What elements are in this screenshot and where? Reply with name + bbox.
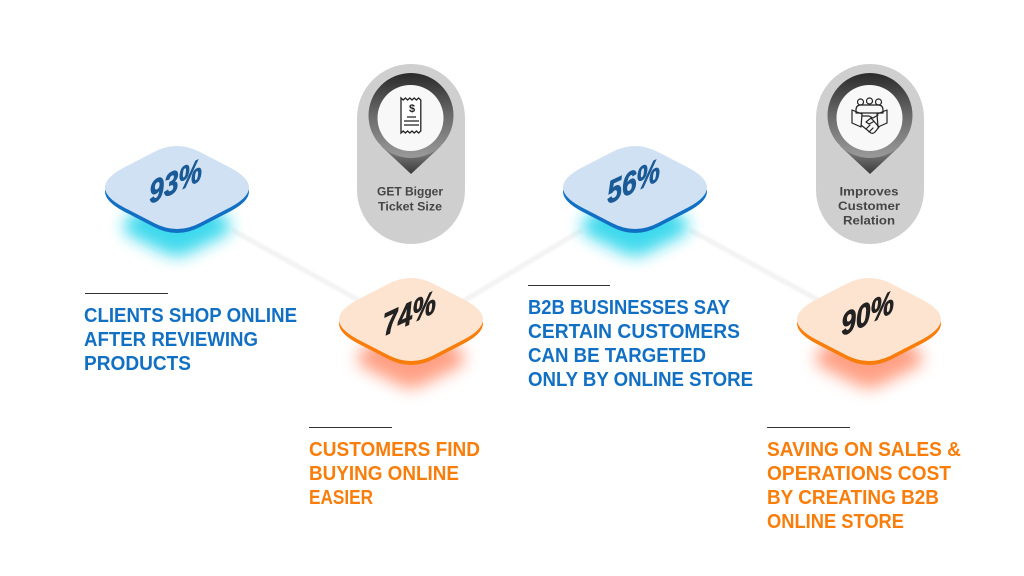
text block: saving on sales: OPERATIONS COST [767, 463, 951, 485]
text block: b2b businesses: CERTAIN CUSTOMERS [528, 321, 740, 343]
stat diamond: 93% [105, 146, 249, 256]
stat diamond: 90% [797, 278, 941, 388]
connector lines [232, 230, 818, 302]
stat diamond: 56% [563, 146, 707, 256]
text block: clients shop online [84, 293, 297, 375]
stat diamond: 93%: 93% [148, 153, 203, 212]
text block: customers find buying easier [309, 427, 480, 509]
text block: customers find buying easier: CUSTOMERS FIND [309, 439, 480, 461]
text block: customers find buying easier: BUYING ONLINE [309, 463, 459, 485]
text block: clients shop online: CLIENTS SHOP ONLINE [84, 305, 297, 327]
pill label: Improves [840, 184, 899, 198]
pin marker [368, 73, 454, 174]
stat diamond: 90%: 90% [840, 285, 895, 344]
text block: customers find buying easier: EASIER [309, 487, 373, 509]
icon: handshake with people [836, 85, 902, 151]
text block: b2b businesses: CAN BE TARGETED [528, 345, 706, 367]
text block: saving on sales: BY CREATING B2B [767, 487, 939, 509]
pin marker [828, 73, 912, 174]
pill label [377, 184, 443, 214]
pill label: Customer [838, 199, 900, 213]
text block: b2b businesses [528, 285, 753, 391]
text block: clients shop online: PRODUCTS [84, 353, 191, 375]
pill: improves customer relation [816, 64, 924, 244]
icon: receipt [378, 85, 444, 151]
text block: saving on sales [767, 427, 961, 533]
text block: b2b businesses: B2B BUSINESSES SAY [528, 297, 731, 319]
text block: clients shop online: AFTER REVIEWING [84, 329, 258, 351]
pill label [838, 184, 900, 228]
pill: get bigger ticket size [357, 64, 465, 244]
pill label: GET Bigger [377, 184, 443, 198]
pill label: Ticket Size [378, 200, 442, 214]
text block: saving on sales: SAVING ON SALES & [767, 439, 961, 461]
stat diamond: 74%: 74% [382, 285, 437, 344]
icon: receipt: $ [409, 103, 415, 115]
stat diamond: 56%: 56% [606, 153, 661, 212]
stat diamond: 74% [339, 278, 483, 388]
pill label: Relation [843, 214, 895, 228]
text block: b2b businesses: ONLY BY ONLINE STORE [528, 369, 753, 391]
text block: saving on sales: ONLINE STORE [767, 511, 904, 533]
